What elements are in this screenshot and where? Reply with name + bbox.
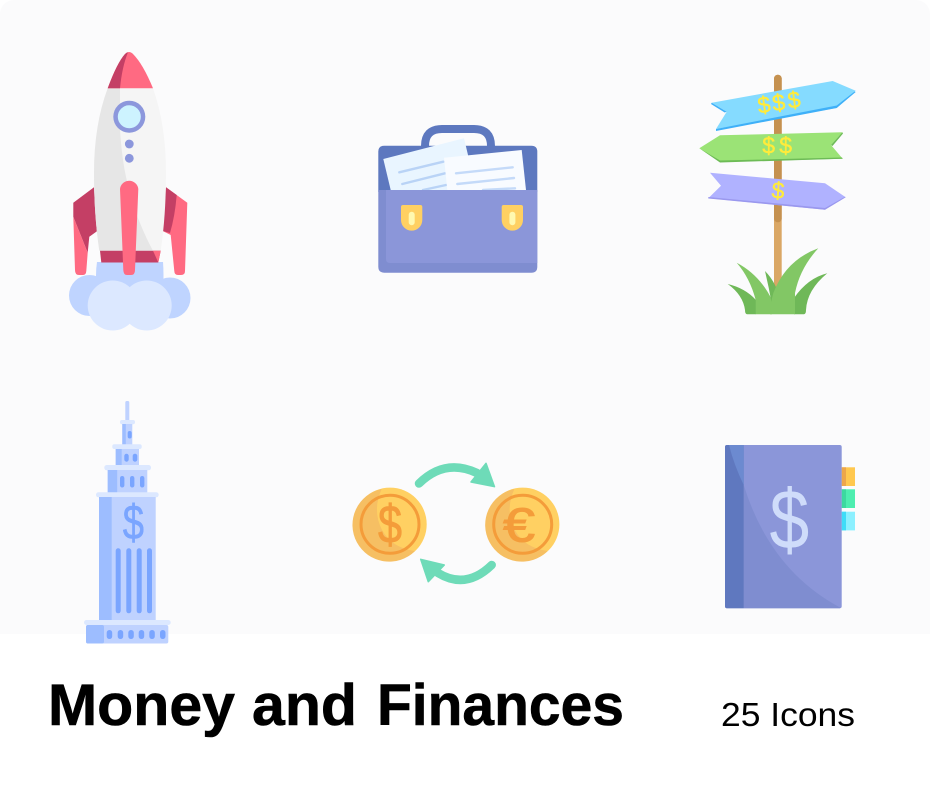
right clasp: [502, 205, 523, 231]
title: and: [252, 673, 357, 738]
sign: green arrow: [699, 132, 843, 162]
dollar coin: [352, 488, 427, 562]
notebook spine: [725, 445, 744, 608]
icon count: 25 Icons: [721, 696, 855, 733]
rocket body shade: [94, 88, 153, 251]
dollar signs on blue arrow: $: [756, 91, 772, 118]
dollar sign on purple arrow: $: [771, 177, 786, 204]
signpost pole: [774, 75, 782, 288]
tower dollar sign: $: [123, 496, 144, 550]
sign: blue arrow: [711, 81, 856, 131]
icon: notebook: [725, 445, 855, 608]
rocket nose cone: [108, 52, 153, 88]
icon: briefcase: [378, 129, 537, 273]
briefcase handle: [425, 129, 491, 150]
title: Finances: [377, 673, 624, 738]
rocket right fin: [163, 187, 187, 275]
notebook dollar sign: $: [769, 472, 809, 567]
euro coin: [485, 488, 559, 562]
rocket left fin: [73, 187, 97, 275]
notebook tabs: [842, 467, 855, 530]
tower tier 3: [104, 465, 151, 492]
icon: signpost: [699, 75, 856, 314]
dollar signs on blue arrow: $: [770, 89, 787, 116]
dollar signs on blue arrow: $: [786, 86, 802, 113]
arrow: euro to dollar: [421, 559, 492, 582]
document two: [444, 150, 526, 190]
tower base: [84, 620, 171, 644]
dollar signs on green arrow: $: [762, 133, 775, 159]
dollar signs on green arrow: [762, 133, 792, 159]
tower main shaft: [96, 492, 159, 620]
tower tier 2: [112, 444, 142, 465]
notebook cover: [725, 445, 842, 608]
rocket bottom band: [100, 251, 161, 262]
dollar signs on blue arrow: [756, 86, 802, 118]
briefcase back: [378, 146, 537, 192]
left clasp: [401, 205, 422, 231]
briefcase front: [378, 190, 537, 273]
sign: purple arrow: [708, 173, 846, 210]
rocket portholes: [125, 140, 134, 163]
tower spire: [120, 401, 135, 444]
icon: skyscraper: [84, 401, 171, 644]
rocket centre fin: [120, 181, 138, 275]
icon: rocket: [69, 52, 190, 330]
rocket body: [94, 88, 166, 251]
rocket exhaust cloud: [69, 262, 190, 330]
grass: [728, 248, 827, 314]
icon: currency exchange: [352, 463, 559, 582]
title: Money: [48, 673, 235, 738]
rocket window: [113, 101, 145, 133]
tower columns: [116, 548, 152, 613]
dollar coin: $: [378, 496, 402, 555]
arrow: dollar to euro: [419, 463, 494, 487]
dollar signs on green arrow: $: [779, 133, 792, 159]
euro coin: €: [503, 499, 535, 552]
notebook cover shade: [744, 485, 840, 608]
document one: [383, 138, 468, 190]
